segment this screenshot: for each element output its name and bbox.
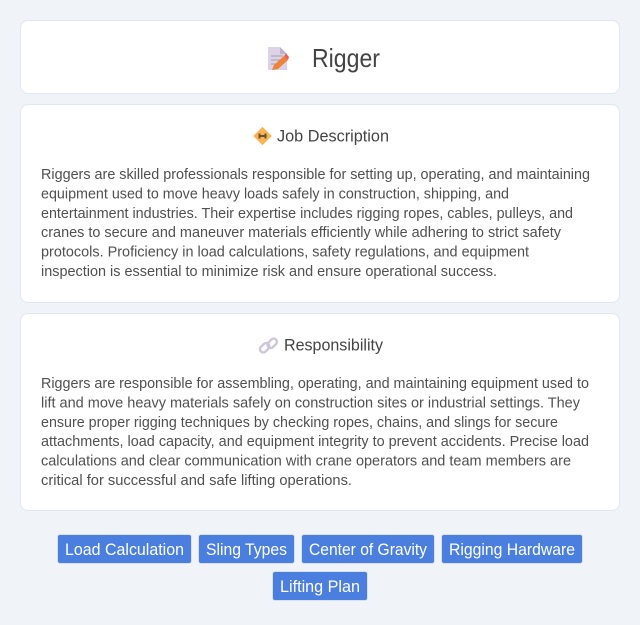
panel: title <box>20 20 620 94</box>
responsibility body text <box>41 376 589 489</box>
job description body text <box>41 167 590 280</box>
icon: orange diamond sign <box>254 128 271 144</box>
responsibility body text: ensure proper rigging techniques by checking ropes, chains, and slings for secure <box>41 415 558 431</box>
tag: Sling Types: Sling Types <box>206 541 287 559</box>
tag: Rigging Hardware <box>441 534 582 564</box>
job description body text: protocols. Proficiency in load calculations, safety regulations, and equipment <box>41 245 529 261</box>
tag: Load Calculation: Load Calculation <box>65 541 184 559</box>
tag: Lifting Plan <box>272 571 368 601</box>
responsibility body text: Riggers are responsible for assembling, operating, and maintaining equipment used to <box>41 376 589 392</box>
responsibility body text: calculations and clear communication with crane operators and team members are <box>41 454 571 470</box>
icon: document with pencil <box>268 47 289 70</box>
job description body text: equipment used to move heavy loads safely in construction, shipping, and <box>41 186 509 202</box>
tag: Center of Gravity <box>301 534 435 564</box>
tag: Rigging Hardware: Rigging Hardware <box>449 541 575 559</box>
responsibility body text: critical for successful and safe lifting operations. <box>41 473 352 489</box>
title text: Rigger <box>312 43 380 73</box>
tag: Load Calculation <box>57 534 192 564</box>
tag: Sling Types <box>198 534 294 564</box>
tag: Lifting Plan: Lifting Plan <box>280 578 360 596</box>
panel: job description <box>20 104 620 303</box>
tag: Center of Gravity: Center of Gravity <box>309 541 428 559</box>
heading: responsibility: Responsibility <box>284 336 384 354</box>
responsibility body text: lift and move heavy materials safely on construction sites or industrial settings. They <box>41 395 581 411</box>
job description body text: Riggers are skilled professionals responsible for setting up, operating, and maintaining <box>41 167 590 183</box>
panel: responsibility <box>20 313 620 511</box>
icon: chain link <box>259 337 278 354</box>
job description body text: inspection is essential to minimize risk and ensure operational success. <box>41 264 497 280</box>
responsibility body text: attachments, load capacity, and equipment integrity to prevent accidents. Precise load <box>41 434 589 450</box>
job description body text: entertainment industries. Their expertise includes rigging ropes, cables, pulleys, and <box>41 206 573 222</box>
heading: job description: Job Description <box>277 128 389 146</box>
job description body text: cranes to secure and maneuver materials efficiently while adhering to strict safety <box>41 225 562 241</box>
